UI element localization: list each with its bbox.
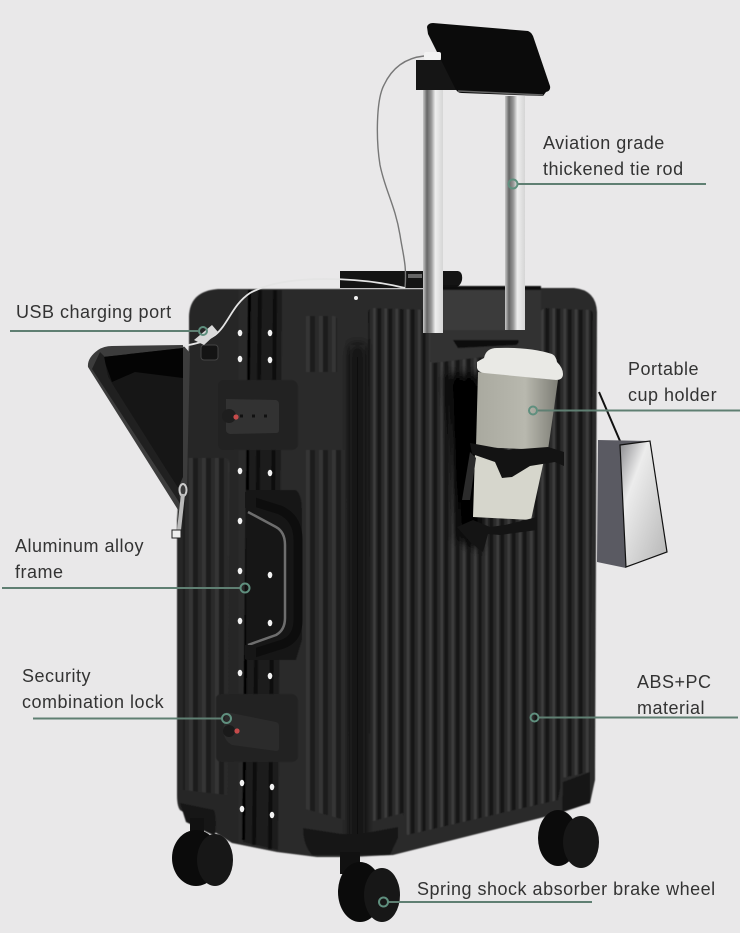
icon: lower combination lock [223, 712, 279, 751]
icon: trolley handle and phone [377, 23, 550, 333]
callout: aluminum alloy frame [2, 536, 250, 592]
icon: open front pocket [88, 345, 190, 513]
upper cup [476, 372, 558, 450]
back left wheel [172, 818, 233, 886]
front center wheel [338, 852, 400, 922]
right front face [345, 288, 597, 857]
holder [470, 443, 564, 478]
icon: rivets [238, 296, 358, 818]
lower cup [473, 452, 544, 520]
upper lock recess [218, 380, 298, 450]
ribs: left face lower block [183, 458, 229, 795]
aluminum frame [242, 290, 282, 850]
icon: upper combination lock [222, 399, 279, 434]
ribs: frame side upper [303, 316, 337, 372]
callout: ABS+PC material: material [637, 698, 705, 718]
callout: security combination lock [22, 666, 231, 723]
trolley well [430, 286, 541, 363]
left side face [177, 289, 362, 857]
handle recess [246, 490, 302, 660]
icon: side handle [245, 492, 298, 659]
cup lid [477, 348, 563, 380]
callout: security combination lock: combination lock [22, 692, 165, 712]
callout: portable cup holder [529, 359, 740, 414]
icon: wheels [172, 810, 599, 922]
callout: aluminum alloy frame: Aluminum alloy [15, 536, 144, 556]
callout: ABS+PC material [530, 672, 738, 722]
phone [427, 23, 550, 96]
back right wheel [538, 810, 599, 868]
callout: spring shock absorber brake wheel: Spring shock absorber brake wheel [417, 879, 716, 899]
icon: shopping bag [597, 392, 667, 568]
callout: aviation grade tie rod: Aviation grade [543, 133, 665, 153]
callout: security combination lock: Security [22, 666, 91, 686]
charging cable to phone [377, 56, 424, 288]
icon: power bank on top of suitcase [340, 271, 462, 288]
callout: aviation grade tie rod: thickened tie rod [543, 159, 684, 179]
icon: USB port and cable [183, 279, 405, 360]
lower lock recess [216, 694, 298, 762]
ribs: frame side lower [302, 450, 345, 820]
trolley tie rods [423, 88, 525, 333]
callout: portable cup holder: Portable [628, 359, 699, 379]
ribs: right face [368, 308, 593, 835]
bottom corner guards [180, 772, 590, 855]
corner edge shading [350, 345, 365, 850]
callout: ABS+PC material: ABS+PC [637, 672, 712, 692]
callout: USB charging port [10, 302, 207, 335]
handle grip [416, 60, 460, 90]
callout: portable cup holder: cup holder [628, 385, 717, 405]
callout: spring shock absorber brake wheel [379, 879, 716, 906]
icon: zipper pull [172, 484, 186, 538]
icon: coffee cup and holder [457, 348, 564, 552]
shadow behind cup holder [446, 375, 482, 548]
callout: USB charging port: USB charging port [16, 302, 172, 322]
suitcase body [177, 286, 597, 857]
callout: aluminum alloy frame: frame [15, 562, 64, 582]
callout: aviation grade tie rod [508, 133, 706, 188]
